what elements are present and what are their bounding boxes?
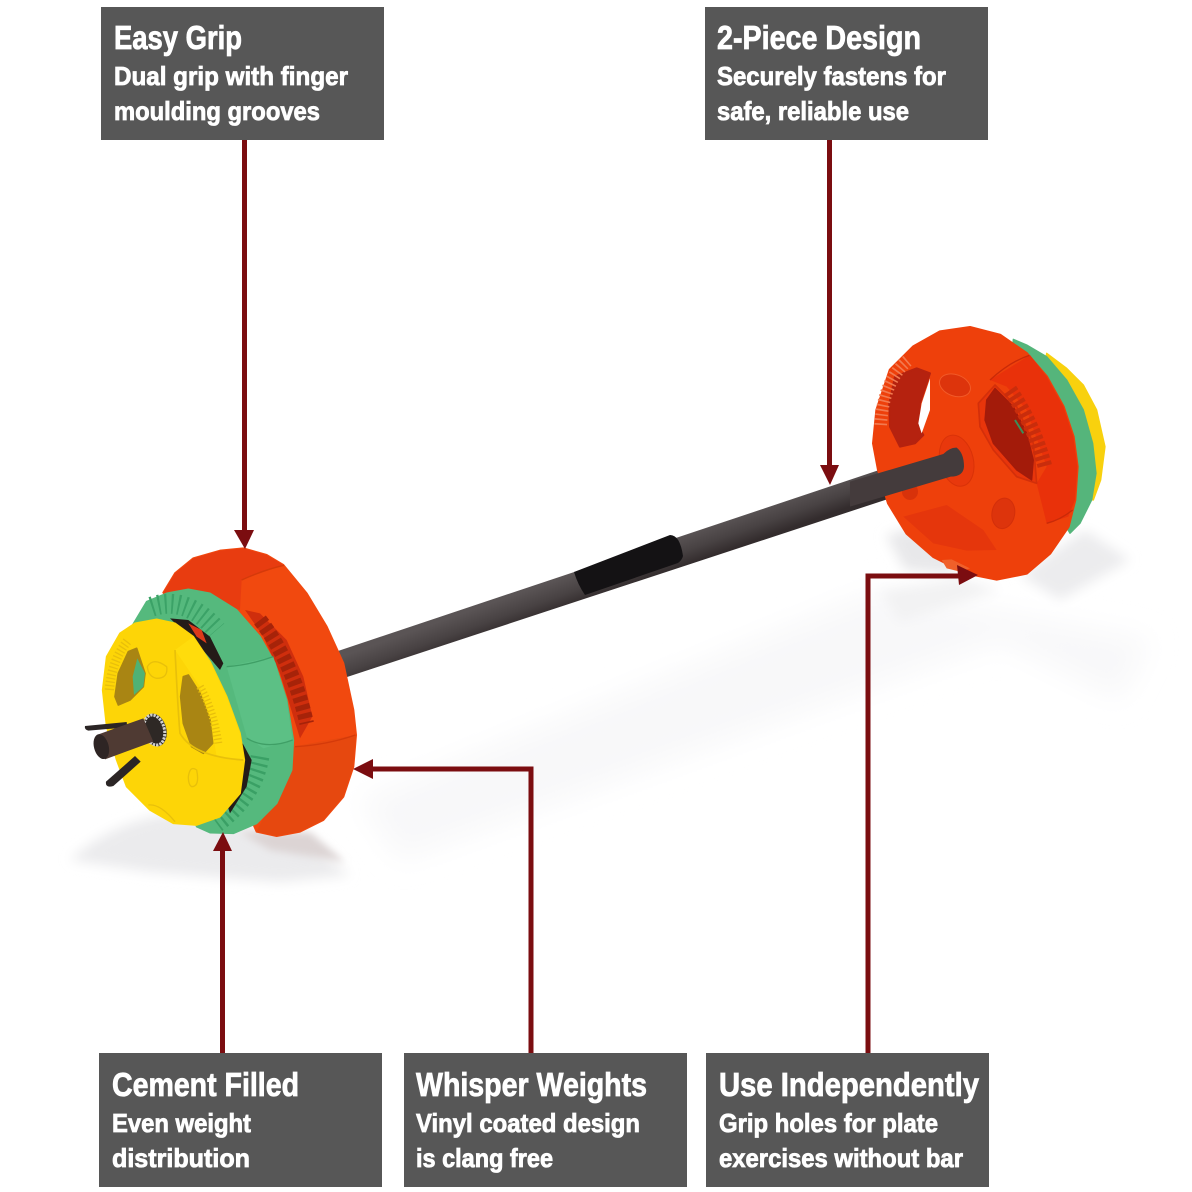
heading: Use Independently: Use Independently [719,1066,980,1103]
barbell [85,327,1105,836]
text: vinyl line 1: Vinyl coated design [416,1108,640,1138]
text: Dual grip line 1: Dual grip with finger [114,61,348,91]
green left plate [133,589,293,833]
groove [245,610,312,738]
yellow grip hole left [109,640,145,705]
spring collar [85,711,170,787]
arrow: Cement Filled to plates [213,832,232,1053]
text: vinyl line 2: is clang free [416,1143,553,1173]
heading: 2-Piece Design: 2-Piece Design [717,19,921,56]
yellow ovals [147,662,198,822]
lower recess [903,505,997,551]
bar shaft [335,447,958,678]
yellow left plate [103,619,244,825]
yellow grip hole right [175,650,243,760]
text: fastens line 1: Securely fastens for [717,61,946,91]
panel: Cement Filled [99,1053,382,1187]
text: fastens line 2: safe, reliable use [717,96,909,126]
raised oval [936,370,974,401]
collar handles [85,722,127,731]
arrow: Use Independently to right plate [868,565,978,1053]
floor shadows [70,525,1150,882]
red left plate [163,548,356,836]
panel: 2-Piece Design [705,7,988,140]
arrow: 2-Piece Design to bar [820,140,839,485]
bar end [97,718,153,759]
panel: Whisper Weights [404,1053,687,1187]
bar front section [850,448,964,507]
text: grip holes line 2: exercises without bar [719,1143,963,1173]
dark gap [170,618,223,670]
heading: Whisper Weights: Whisper Weights [416,1066,647,1103]
right plate grip hole left [881,360,930,447]
right plate grip hole right [978,385,1045,483]
panel: Easy Grip [101,7,384,140]
yellow right plate [1037,353,1105,500]
heading: Easy Grip: Easy Grip [114,19,242,56]
text: Dual grip line 2: moulding grooves [114,96,320,126]
panel: Use Independently [706,1053,989,1187]
heading: Cement Filled: Cement Filled [112,1066,299,1103]
right band [990,355,1077,523]
foam grip [574,535,683,595]
hub [934,431,979,490]
green ridges [152,604,217,630]
red right plate [873,327,1077,579]
green right plate [1010,339,1096,533]
left plate group [85,548,356,836]
arrow: Whisper Weights to red plate [353,759,531,1053]
arrow: Easy Grip to red plate [234,140,254,549]
right plate group [850,327,1105,579]
text: grip holes line 1: Grip holes for plate [719,1108,938,1138]
text: even weight line 1: Even weight [112,1108,251,1138]
small bottom oval [942,559,970,572]
text: even weight line 2: distribution [112,1143,250,1173]
